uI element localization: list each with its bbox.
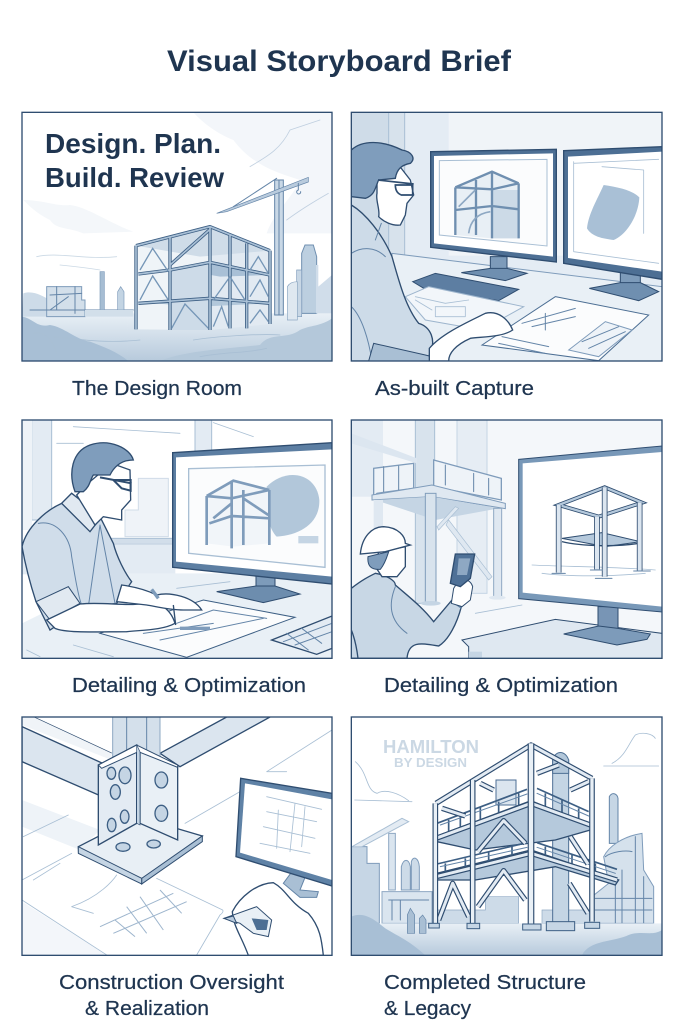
- panel: Detailing & Optimization, site: [351, 420, 662, 658]
- caption: The Design Room: The Design Room: [72, 378, 242, 400]
- background plant left: [351, 818, 432, 923]
- monitor: [173, 443, 332, 603]
- desk: [392, 252, 662, 287]
- monitor two: [564, 147, 662, 301]
- panel headline: Design. Plan.: [45, 128, 221, 159]
- desk: [462, 619, 662, 658]
- distant plant right: [287, 245, 332, 320]
- caption: Detailing & Optimization right: Detailing & Optimization: [384, 675, 618, 697]
- main frame and bracing: [435, 743, 617, 925]
- caption: Construction Oversight: Construction Oversight: [59, 972, 284, 994]
- desk: [22, 573, 332, 658]
- caption: Detailing & Optimization left: Detailing & Optimization: [72, 675, 306, 697]
- steel platforms: [437, 788, 619, 885]
- background plant right: [592, 794, 654, 923]
- sky clouds: [23, 112, 332, 270]
- tower crane: [217, 177, 308, 315]
- title: Visual Storyboard Brief: [167, 45, 512, 78]
- panel headline: Build. Review: [45, 162, 224, 193]
- keyboard: [413, 273, 519, 301]
- central column: [496, 752, 569, 923]
- worker with handheld scanner: [351, 527, 475, 658]
- large monitor: [519, 446, 662, 645]
- watermark: Hamilton by Design: HAMILTON: [383, 737, 479, 757]
- hand with pencil: [224, 883, 323, 955]
- workers: [407, 908, 426, 933]
- man at desk: [351, 142, 513, 361]
- mid plant behind frame: [435, 897, 592, 923]
- blueprint sheet: [22, 853, 223, 955]
- ground: [351, 923, 662, 955]
- caption: Completed Structure: Completed Structure: [384, 972, 586, 994]
- clouds: [355, 733, 659, 802]
- hills: [22, 317, 332, 361]
- man drawing: [22, 443, 202, 632]
- caption: Completed Structure: [384, 972, 586, 1020]
- base plate and bracket: [78, 745, 202, 884]
- window and wall: [22, 420, 253, 574]
- site structure: [351, 420, 522, 613]
- distant plant left: [22, 272, 133, 317]
- footings: [429, 922, 600, 931]
- panel: Completed Structure: [351, 717, 662, 955]
- panel: The Design Room: [22, 112, 332, 361]
- caption: Construction Oversight: & Realization: [85, 998, 209, 1020]
- watermark: Hamilton by Design: BY DESIGN: [394, 755, 467, 770]
- steel frame building: [136, 227, 270, 330]
- blueprints: [405, 287, 649, 361]
- keyboard: [272, 616, 332, 654]
- ground: [22, 313, 332, 361]
- panel: Detailing & Optimization, designer: [22, 420, 332, 658]
- side monitor: [236, 778, 332, 897]
- caption: Completed Structure: & Legacy: [384, 998, 471, 1020]
- panel headline: [45, 128, 224, 193]
- steel beams: [22, 717, 332, 837]
- watermark: Hamilton by Design: [383, 737, 479, 770]
- monitor one: [431, 149, 556, 281]
- caption: Construction Oversight: [59, 972, 284, 1020]
- panel: Construction Oversight: [22, 717, 332, 955]
- caption: As-built Capture: As-built Capture: [375, 378, 534, 400]
- drawing sheet: [100, 600, 295, 657]
- panel: As-built Capture: [351, 112, 662, 361]
